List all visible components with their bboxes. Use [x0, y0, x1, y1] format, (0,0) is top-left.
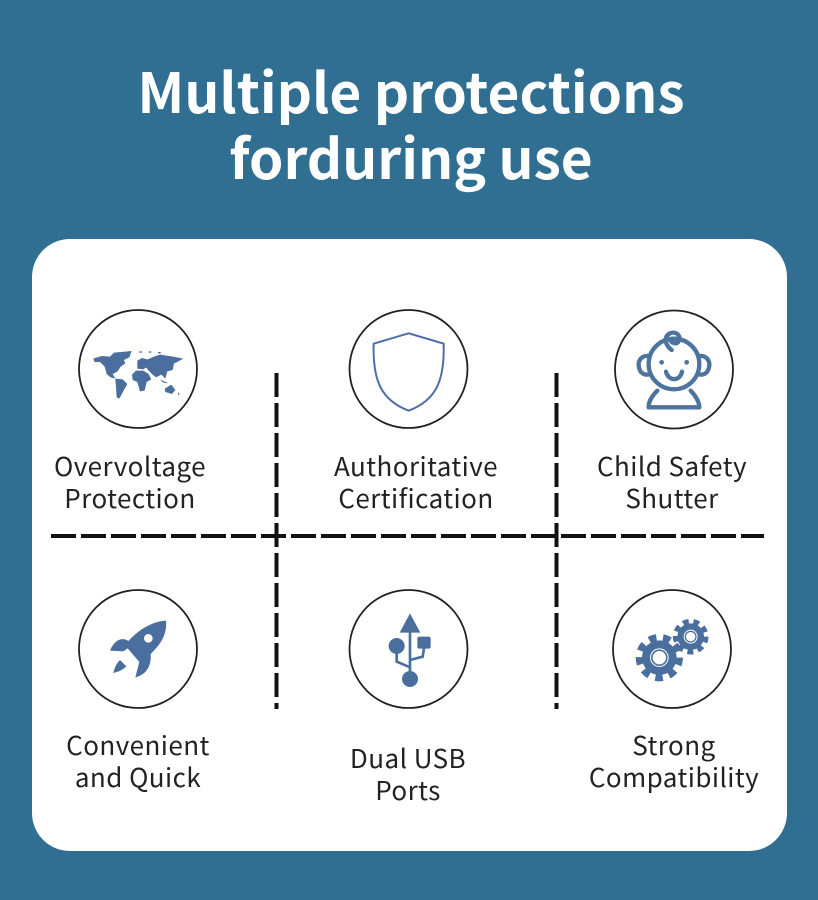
- label: Overvoltage Protection: [54, 447, 206, 516]
- icon: baby face: [615, 310, 733, 428]
- label: Authoritative Certification: Authoritative: [334, 447, 498, 484]
- label: Overvoltage Protection: Overvoltage: [54, 447, 206, 484]
- icon: gears: [613, 590, 731, 708]
- label: Child Safety Shutter: Shutter: [625, 479, 719, 516]
- panel: features card: [32, 239, 787, 851]
- label: Dual USB Ports: Ports: [375, 771, 441, 808]
- label: Dual USB Ports: [350, 739, 466, 808]
- label: Strong Compatibility: [589, 726, 759, 795]
- label: Strong Compatibility: Strong: [632, 726, 716, 763]
- label: Convenient and Quick: and Quick: [75, 758, 201, 795]
- label: Convenient and Quick: [66, 726, 210, 795]
- label: Child Safety Shutter: [597, 447, 747, 516]
- title: forduring use: [229, 115, 593, 195]
- icon: shield: [350, 310, 468, 428]
- label: Authoritative Certification: Certification: [338, 479, 494, 516]
- title: Multiple protections: [137, 49, 685, 129]
- label: Dual USB Ports: Dual USB: [350, 739, 466, 776]
- label: Child Safety Shutter: Child Safety: [597, 447, 747, 484]
- icon: USB symbol: [350, 590, 468, 708]
- label: Convenient and Quick: Convenient: [66, 726, 210, 763]
- icon: world map: [79, 310, 197, 428]
- label: Strong Compatibility: Compatibility: [589, 758, 759, 795]
- label: Authoritative Certification: [334, 447, 498, 516]
- title: [137, 49, 685, 195]
- label: Overvoltage Protection: Protection: [64, 479, 196, 516]
- icon: rocket: [79, 590, 197, 708]
